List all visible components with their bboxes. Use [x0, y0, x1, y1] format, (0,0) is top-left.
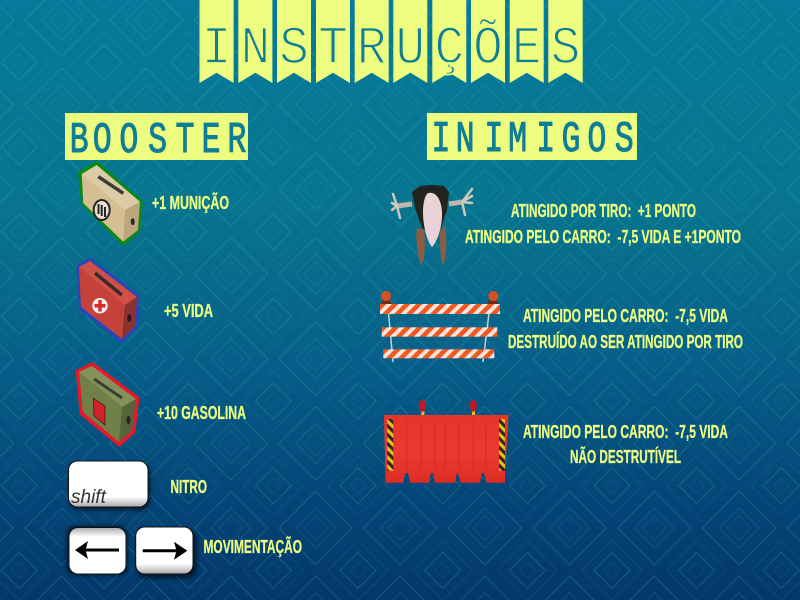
- text: barrier effects: [523, 421, 728, 467]
- icon: fuel box: [78, 364, 137, 444]
- icon: health box: [78, 260, 138, 341]
- label: gasolina: +10 GASOLINA: [157, 402, 246, 423]
- icon: striped barricade: [380, 291, 500, 362]
- heading: booster: BOOSTER: [70, 115, 246, 166]
- label: vida: +5 VIDA: [164, 300, 213, 321]
- icon: right arrow key: [136, 527, 197, 578]
- text: barrier effects: NÃO DESTRUTÍVEL: [570, 446, 681, 467]
- icon: shift key: [68, 461, 150, 510]
- text: enemy creature effects: [465, 200, 741, 247]
- text: barricade effects: [508, 305, 743, 352]
- icon: shift key: shift: [71, 487, 107, 508]
- icon: ammo box: [80, 163, 141, 243]
- label: municao: +1 MUNIÇÃO: [152, 192, 229, 213]
- icon: left arrow key: [67, 526, 127, 575]
- label: nitro: NITRO: [170, 476, 207, 497]
- title banner: INSTRUÇÕES: [202, 18, 580, 80]
- icon: red barrier: [384, 400, 508, 483]
- text: enemy creature effects: ATINGIDO POR TIRO: +1 PONTO: [511, 200, 696, 221]
- heading: inimigos: INIMIGOS: [431, 114, 634, 165]
- icon: enemy creature: [392, 185, 472, 266]
- label: movimentacao: MOVIMENTAÇÃO: [204, 536, 302, 557]
